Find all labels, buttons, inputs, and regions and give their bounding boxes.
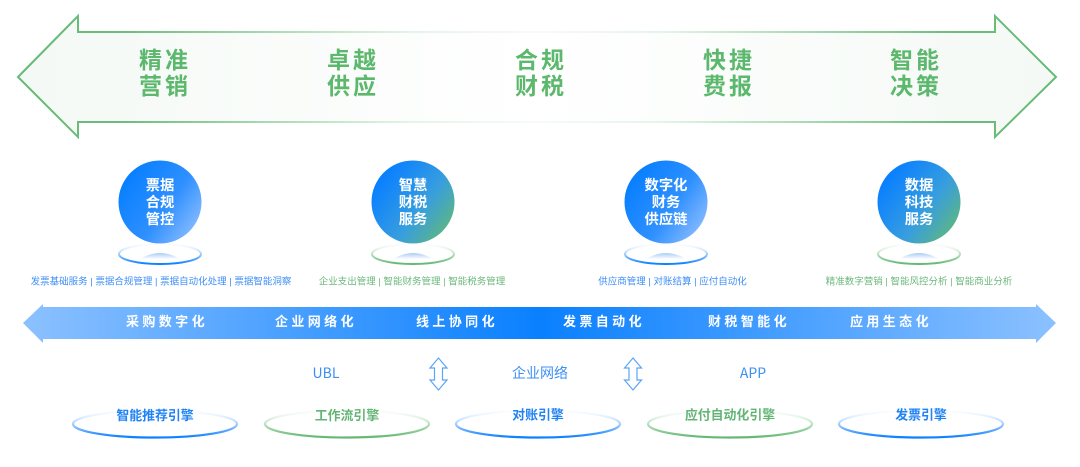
banner label: 智能决策: [890, 47, 942, 99]
engine: 工作流引擎: [265, 408, 429, 438]
connector label: APP: APP: [740, 363, 766, 383]
service 1: 票据合规管控: 票据: [146, 176, 174, 194]
service 3: 数字化财务供应链: 数字化: [645, 176, 687, 194]
icon: double arrow left: [430, 358, 447, 390]
banner label: 合规财税: [515, 47, 567, 99]
service 2: 智慧财税服务: 智慧: [399, 176, 427, 194]
service 1: 票据合规管控: 发票基础服务 | 票据合规管理 | 票据自动化处理 | 票据智能洞察: [31, 276, 292, 288]
banner label: 精准营销: [139, 47, 191, 99]
engine: 应付自动化引擎: 应付自动化引擎: [685, 408, 775, 422]
engine: 对账引擎: [456, 408, 620, 438]
banner label: 快捷费报: 快捷: [703, 47, 755, 73]
connector label: UBL: UBL: [313, 363, 340, 383]
banner label: 快捷费报: 费报: [703, 73, 755, 99]
engine: 智能推荐引擎: [73, 408, 237, 438]
banner label: 智能决策: 决策: [890, 73, 942, 99]
blue double-headed process bar: 采购数字化: [126, 314, 208, 329]
service 3: 数字化财务供应链: 供应链: [645, 210, 687, 228]
service 3: 数字化财务供应链: 供应商管理 | 对账结算 | 应付自动化: [598, 276, 747, 288]
blue double-headed process bar: 应用生态化: [850, 314, 932, 329]
service 3: 数字化财务供应链: [598, 160, 747, 288]
service 4: 数据科技服务: 精准数字营销 | 智能风控分析 | 智能商业分析: [826, 276, 1013, 288]
service 4: 数据科技服务: [826, 160, 1013, 288]
icon: double arrow right: [624, 358, 642, 390]
service 1: 票据合规管控: [31, 160, 292, 288]
service 2: 智慧财税服务: 财税: [399, 194, 427, 211]
banner label: 精准营销: 精准: [139, 47, 191, 73]
engine: 智能推荐引擎: 智能推荐引擎: [116, 408, 194, 423]
engine: 对账引擎: 对账引擎: [512, 408, 564, 422]
engine: 发票引擎: 发票引擎: [895, 408, 947, 422]
banner label: 卓越供应: 卓越: [327, 47, 379, 73]
service 2: 智慧财税服务: [319, 160, 506, 288]
banner label: 卓越供应: 供应: [327, 73, 379, 99]
blue double-headed process bar: 线上协同化: [416, 314, 498, 329]
connector label: 企业网络: 企业网络: [512, 363, 568, 383]
blue double-headed process bar: [23, 304, 1056, 343]
banner label: 智能决策: 智能: [890, 47, 942, 73]
banner label: 快捷费报: [703, 47, 755, 99]
blue double-headed process bar: 财税智能化: [708, 314, 790, 329]
engine: 应付自动化引擎: [648, 408, 812, 438]
banner label: 精准营销: 营销: [139, 73, 191, 99]
banner label: 合规财税: 财税: [515, 73, 567, 99]
banner label: 合规财税: 合规: [515, 47, 567, 73]
service 2: 智慧财税服务: 企业支出管理 | 智能财务管理 | 智能税务管理: [319, 276, 506, 288]
banner label: 卓越供应: [327, 47, 379, 99]
service 1: 票据合规管控: 管控: [146, 210, 174, 228]
engine: 发票引擎: [839, 408, 1003, 438]
blue double-headed process bar: 企业网络化: [275, 314, 357, 329]
service 4: 数据科技服务: 服务: [905, 210, 933, 228]
double-headed arrow banner: [18, 16, 1056, 137]
blue double-headed process bar: 发票自动化: [563, 314, 645, 329]
engine: 工作流引擎: 工作流引擎: [315, 408, 379, 423]
service 1: 票据合规管控: 合规: [146, 193, 174, 211]
service 4: 数据科技服务: 数据: [905, 176, 933, 194]
service 4: 数据科技服务: 科技: [905, 193, 934, 211]
service 3: 数字化财务供应链: 财务: [652, 193, 680, 211]
service 2: 智慧财税服务: 服务: [399, 210, 427, 228]
